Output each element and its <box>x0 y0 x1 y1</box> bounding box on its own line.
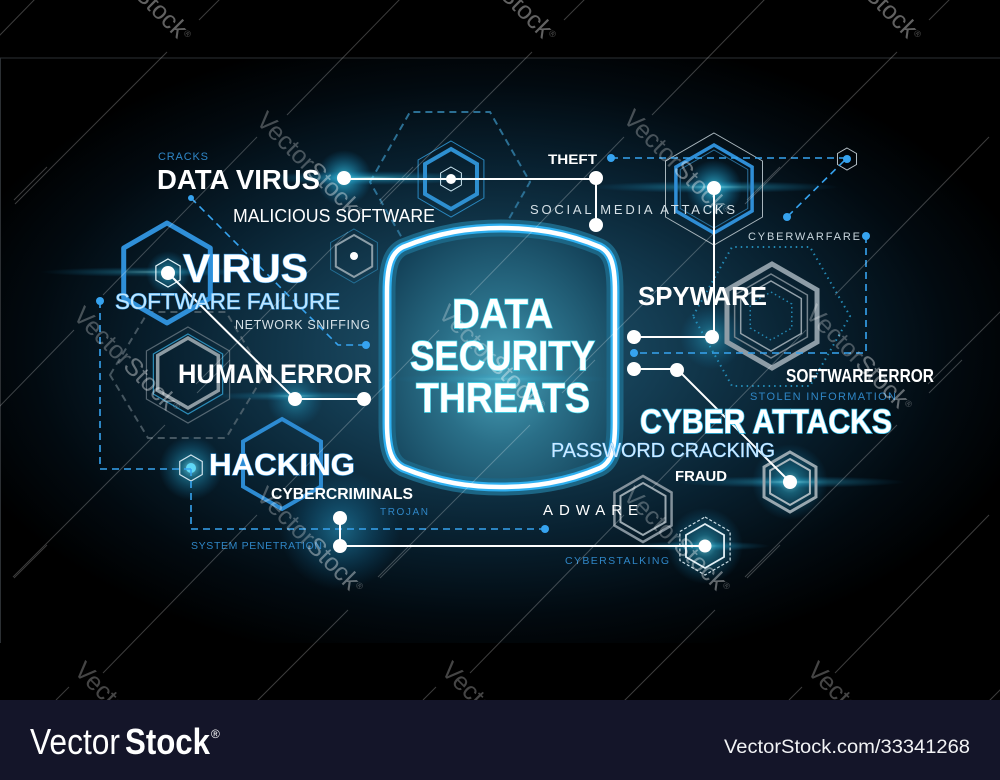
watermarks: VectorStock <box>251 481 365 596</box>
labels left <box>115 151 435 552</box>
icon: hacking node hexagon <box>180 455 202 481</box>
icon: virus hexagon <box>124 223 210 323</box>
labels right: SPYWARE <box>638 281 767 311</box>
labels left: SOFTWARE FAILURE <box>115 289 340 314</box>
labels left: HACKING <box>209 447 355 482</box>
watermarks: VectorStock <box>800 299 914 414</box>
icon: fraud node hexagon <box>764 452 816 512</box>
labels left: CRACKS <box>158 151 208 163</box>
labels right: SOFTWARE ERROR <box>786 366 934 386</box>
dashed hexagon frames <box>110 112 850 438</box>
labels left: VIRUS <box>183 247 308 291</box>
labels right: CYBER ATTACKS <box>640 403 892 441</box>
watermarks: ® <box>912 28 924 40</box>
labels right <box>530 151 934 567</box>
labels right: ADWARE <box>543 502 638 519</box>
watermarks: VectorStock <box>69 656 183 771</box>
watermarks: VectorStock <box>618 104 732 219</box>
watermarks: VectorStock <box>251 106 365 221</box>
icon: spyware top right hexagon <box>666 133 762 245</box>
connector end dots <box>96 154 870 533</box>
central shield panel <box>387 228 615 487</box>
watermarks: ® <box>903 398 915 410</box>
soft glows <box>40 150 905 590</box>
icon: top center hexagon <box>418 141 484 217</box>
labels left: NETWORK SNIFFING <box>235 318 370 332</box>
watermarks: VectorStock <box>436 656 550 771</box>
labels right: CYBERWARFARE <box>748 231 860 243</box>
watermarks: ® <box>721 580 733 592</box>
labels left: TROJAN <box>380 507 428 518</box>
watermarks: VectorStock <box>618 481 732 596</box>
labels right: SOCIAL MEDIA ATTACKS <box>530 202 735 217</box>
labels left: CYBERCRIMINALS <box>271 486 413 503</box>
icon: adware hexagon <box>614 476 672 542</box>
icon: small hexagon near malicious software <box>331 229 377 283</box>
footer bar <box>0 700 1000 780</box>
labels left: MALICIOUS SOFTWARE <box>233 206 435 226</box>
watermarks: ® <box>547 28 559 40</box>
footer bar: Stock <box>125 721 211 762</box>
watermarks: VectorStock <box>433 299 547 414</box>
footer bar: Vector <box>30 721 120 762</box>
title: THREATS <box>416 374 590 421</box>
watermarks: ® <box>171 400 183 412</box>
white connector lines <box>168 179 790 546</box>
icon: gray hexagon behind human error <box>146 327 230 423</box>
footer bar: VectorStock.com/33341268 <box>724 737 970 758</box>
title <box>410 290 595 421</box>
footer bar: ® <box>211 727 220 741</box>
labels right: PASSWORD CRACKING <box>551 440 775 462</box>
labels right: FRAUD <box>675 468 727 485</box>
white nodes <box>161 171 797 553</box>
labels left: DATA VIRUS <box>157 164 320 195</box>
watermarks: VectorStock <box>802 656 916 771</box>
title: SECURITY <box>410 332 595 379</box>
watermarks: ® <box>354 580 366 592</box>
watermarks: VectorStock <box>68 301 182 416</box>
watermarks: ® <box>721 203 733 215</box>
watermarks: ® <box>536 398 548 410</box>
labels right: THEFT <box>548 151 597 167</box>
icon: hacking hexagon <box>243 419 321 509</box>
title: DATA <box>452 290 553 337</box>
labels left: HUMAN ERROR <box>178 359 372 389</box>
watermarks: ® <box>182 28 194 40</box>
watermarks: ® <box>354 205 366 217</box>
dashed blue connectors <box>100 158 866 529</box>
icon: large gray hexagon right <box>727 264 817 368</box>
icon: small hexagon top right <box>837 148 857 170</box>
labels right: CYBERSTALKING <box>565 555 669 567</box>
icon: cyberstalking hexagon <box>680 517 730 575</box>
labels right: STOLEN INFORMATION <box>750 391 896 403</box>
labels left: SYSTEM PENETRATION <box>191 540 322 552</box>
